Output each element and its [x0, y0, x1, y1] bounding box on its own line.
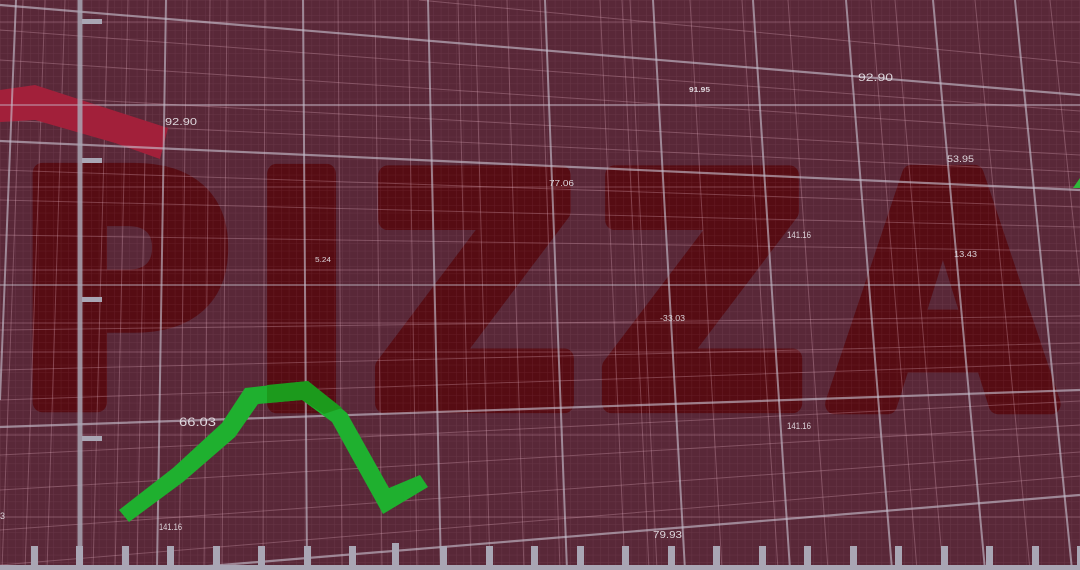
word: PIZZA: I	[251, 112, 352, 478]
value labels: 141.16	[787, 230, 811, 240]
word: PIZZA: A	[833, 112, 1055, 478]
value labels: 53.95	[947, 154, 974, 164]
vertical axis	[78, 0, 102, 570]
green trend line	[119, 381, 428, 522]
word: PIZZA: Z	[372, 114, 577, 477]
word: PIZZA: Z	[598, 113, 806, 477]
value labels: 5.24	[315, 257, 331, 264]
value labels: 13.43	[954, 250, 978, 259]
word: PIZZA: P	[15, 111, 231, 476]
value labels: 92.90	[858, 72, 893, 84]
word: PIZZA	[15, 111, 1055, 478]
value labels: 3	[0, 511, 5, 521]
value labels: 79.93	[653, 530, 683, 541]
horizontal axis	[0, 543, 1080, 570]
value labels: 141.16	[159, 522, 182, 532]
value labels: 66.03	[179, 417, 216, 429]
value labels: -33.03	[660, 314, 686, 323]
value labels: 91.95	[689, 87, 710, 94]
value labels	[0, 72, 978, 541]
red trend line	[0, 85, 168, 159]
green marker at right edge	[1073, 178, 1080, 188]
value labels: 92.90	[165, 117, 198, 128]
value labels: 141.16	[787, 421, 811, 431]
value labels: 77.06	[549, 179, 575, 188]
